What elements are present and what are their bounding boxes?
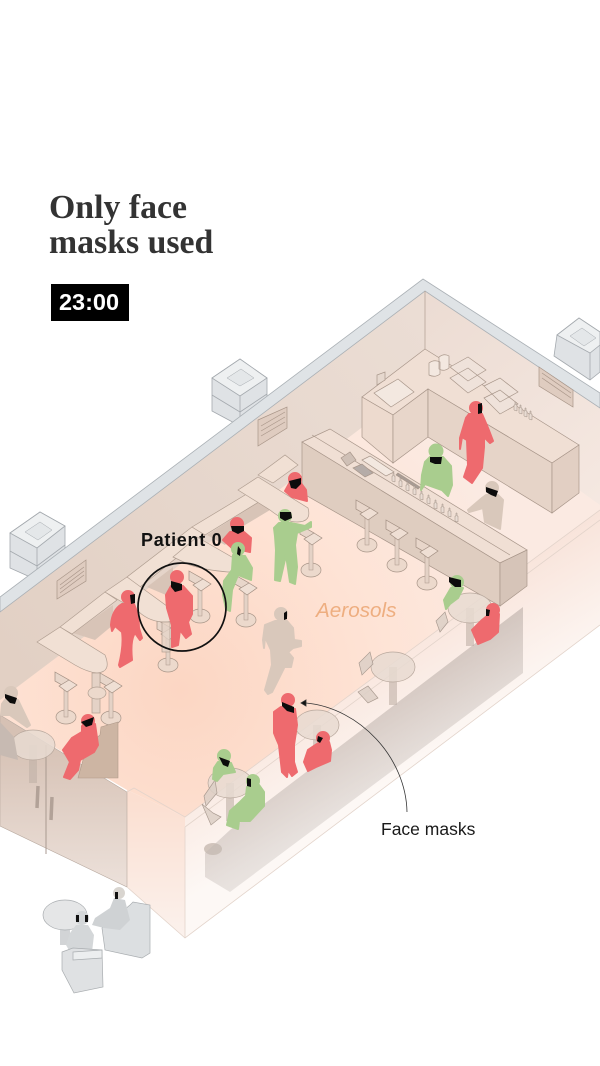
time badge: 23:00 xyxy=(59,289,119,315)
person: standing by counter xyxy=(111,591,142,667)
front corner wall xyxy=(127,790,185,938)
window counters xyxy=(37,455,309,713)
back counter xyxy=(362,349,579,513)
bar counter xyxy=(302,429,527,606)
masks xyxy=(76,892,118,922)
bar stools xyxy=(55,500,438,725)
wall top band xyxy=(0,279,600,612)
face masks xyxy=(5,403,498,787)
outdoor seating group xyxy=(43,887,150,993)
people: red xyxy=(63,402,499,779)
arrow: face masks xyxy=(301,700,407,812)
armchair xyxy=(102,902,150,958)
trays xyxy=(450,357,518,414)
patient 0 marker circle xyxy=(138,563,226,651)
door wall xyxy=(0,715,127,887)
bench shadow xyxy=(205,607,523,892)
person: seated right xyxy=(444,576,463,609)
front right wall xyxy=(185,510,600,938)
person: seated behind table xyxy=(223,518,251,552)
room shell xyxy=(0,279,600,938)
armchair at left xyxy=(78,722,118,778)
label: aerosols: Aerosols xyxy=(314,599,396,622)
low tables through front wall xyxy=(11,593,492,821)
wall vents xyxy=(57,367,573,599)
person: standing with mask arrow xyxy=(274,694,297,777)
grey shadowed seat top left xyxy=(0,722,18,760)
person: seated on stool xyxy=(223,543,252,611)
person: seated top xyxy=(285,473,307,501)
person: seated top left xyxy=(1,687,30,727)
person: standing centre xyxy=(274,510,311,584)
person: behind bar xyxy=(460,402,493,483)
sink xyxy=(374,379,414,407)
doors xyxy=(37,745,52,854)
people: beige xyxy=(1,482,503,727)
person: walking centre xyxy=(263,608,301,694)
left wall xyxy=(0,291,425,720)
person: behind bar right xyxy=(468,482,503,529)
chairs by low tables xyxy=(202,612,448,855)
back right wall xyxy=(425,291,600,520)
person: behind bar xyxy=(421,444,452,496)
time badge xyxy=(51,284,129,321)
title: masks used xyxy=(49,224,214,261)
jars xyxy=(429,355,449,376)
person: seated lower xyxy=(227,775,264,829)
seated person at armchair xyxy=(92,887,130,930)
person: seated bottom left xyxy=(63,715,98,779)
people: green xyxy=(213,444,463,829)
title: Only face xyxy=(49,189,187,226)
table xyxy=(60,930,70,945)
person: seated lower left xyxy=(213,750,235,781)
person: seated by wall table xyxy=(304,732,331,771)
label: face masks: Face masks xyxy=(381,819,476,839)
roof unit: middle xyxy=(212,359,267,426)
chair xyxy=(62,948,103,993)
roof unit: right xyxy=(554,318,600,380)
label: patient 0: Patient 0 xyxy=(141,530,222,550)
floor xyxy=(0,380,600,817)
person: patient 0 xyxy=(166,571,192,647)
person: seated right table xyxy=(472,604,499,644)
roof unit: left xyxy=(10,512,65,580)
bottles xyxy=(514,402,532,420)
seated person front xyxy=(66,911,94,952)
